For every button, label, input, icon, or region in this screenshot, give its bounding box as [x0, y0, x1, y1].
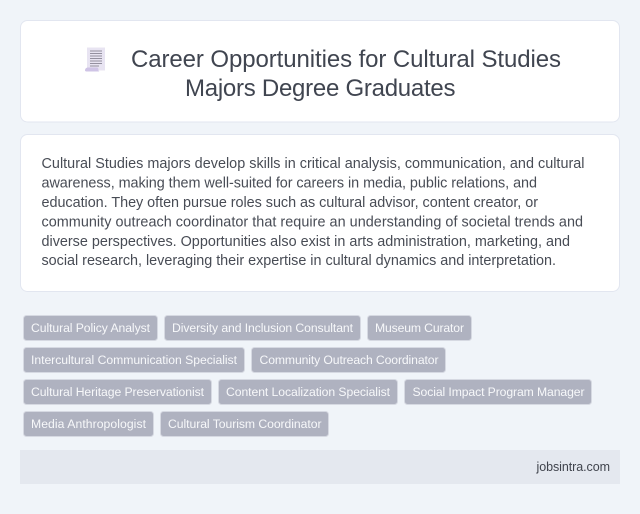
icon: document scroll — [85, 48, 105, 72]
tag — [404, 380, 592, 404]
description paragraph: awareness, making them well-suited for careers in media, public relations, and — [42, 176, 537, 192]
description paragraph: social research, leveraging their expertise in cultural dynamics and interpretation. — [42, 253, 556, 269]
title line 2: Majors Degree Graduates — [185, 75, 456, 102]
panel: title card — [20, 20, 620, 122]
panel: description card — [20, 134, 620, 292]
tag — [24, 348, 244, 372]
description paragraph — [42, 156, 584, 269]
tag: Intercultural Communication Specialist — [31, 353, 238, 367]
footer source text: jobsintra.com — [536, 460, 610, 474]
footer bar — [20, 450, 620, 484]
tag — [24, 412, 154, 436]
tag — [218, 380, 398, 404]
tag — [24, 316, 158, 340]
tag: Media Anthropologist — [31, 417, 147, 431]
tag: Social Impact Program Manager — [412, 385, 584, 399]
description paragraph: education. They often pursue roles such as cultural advisor, content creator, or — [42, 195, 538, 211]
tag: Cultural Heritage Preservationist — [31, 385, 205, 399]
tag — [164, 316, 360, 340]
description paragraph: Cultural Studies majors develop skills in critical analysis, communication, and cultural — [42, 156, 584, 172]
tag: Content Localization Specialist — [226, 385, 391, 399]
tag: Diversity and Inclusion Consultant — [172, 321, 354, 335]
tag — [368, 316, 472, 340]
tag — [252, 348, 446, 372]
description paragraph: diverse perspectives. Opportunities also exist in arts administration, marketing, and — [42, 234, 570, 250]
tag: Cultural Policy Analyst — [31, 321, 151, 335]
title line 1: Career Opportunities for Cultural Studies — [131, 46, 561, 73]
tag: Museum Curator — [375, 321, 464, 335]
tag — [160, 412, 328, 436]
tag: Community Outreach Coordinator — [260, 353, 438, 367]
tag list — [24, 316, 592, 436]
description paragraph: community outreach coordinator that require an understanding of societal trends and — [42, 214, 583, 230]
tag: Cultural Tourism Coordinator — [168, 417, 322, 431]
tag — [24, 380, 212, 404]
